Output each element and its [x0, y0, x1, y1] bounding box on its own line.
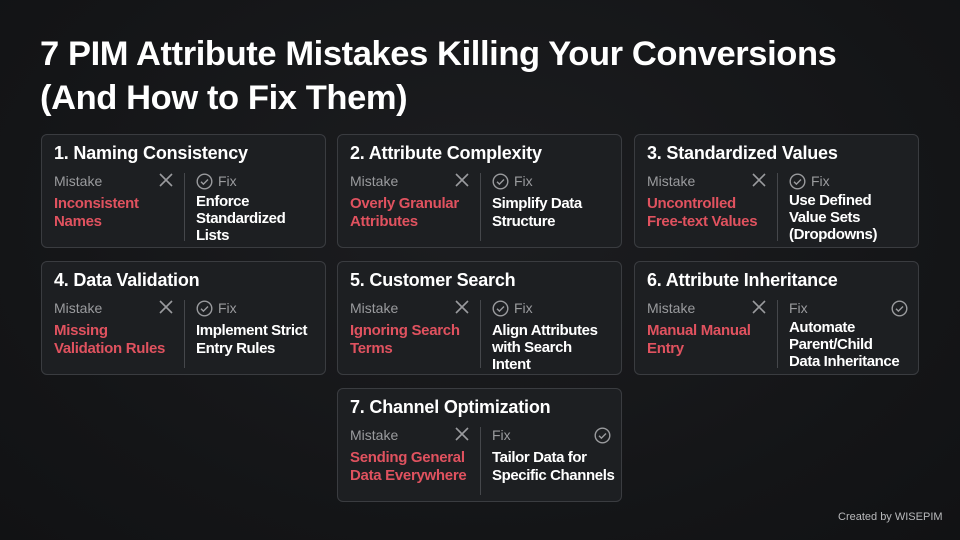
card 7: Data Everywhere [350, 467, 466, 484]
title [40, 35, 836, 117]
card 6: 6. Attribute Inheritance [647, 270, 838, 290]
card 7: Fix [492, 427, 511, 443]
card 6: Parent/Child [789, 336, 873, 353]
card 2: Mistake [350, 173, 398, 189]
card 6: Entry [647, 340, 684, 357]
card 1: 1. Naming Consistency [54, 143, 248, 163]
card 4: Validation Rules [54, 340, 165, 357]
card 2 [337, 134, 622, 248]
card 7: 7. Channel Optimization [350, 397, 550, 417]
card 3 [634, 134, 919, 248]
card 6: Manual Manual [647, 322, 751, 339]
card 4: Entry Rules [196, 340, 275, 357]
card 1: Names [54, 213, 102, 230]
card 1: Enforce [196, 193, 249, 210]
card 6: Fix [789, 300, 808, 316]
card 7: Specific Channels [492, 467, 614, 484]
card 5: Ignoring Search [350, 322, 460, 339]
card 2: Fix [514, 173, 533, 189]
card 3: Use Defined [789, 192, 871, 209]
card 1: Lists [196, 227, 229, 244]
card 6 [634, 261, 919, 375]
card 4: 4. Data Validation [54, 270, 199, 290]
card 5: with Search [492, 339, 572, 356]
credit: Created by WISEPIM [838, 511, 943, 523]
card 5: 5. Customer Search [350, 270, 515, 290]
card 5: Intent [492, 356, 530, 373]
card 3: Uncontrolled [647, 195, 736, 212]
card 2: Structure [492, 213, 555, 230]
card 7: Tailor Data for [492, 449, 587, 466]
title: 7 PIM Attribute Mistakes Killing Your Conversions [40, 35, 836, 73]
card 3: Free-text Values [647, 213, 757, 230]
card 4: Missing [54, 322, 108, 339]
card 1: Fix [218, 173, 237, 189]
card 4: Fix [218, 300, 237, 316]
card 4: Implement Strict [196, 322, 307, 339]
card 6: Automate [789, 319, 855, 336]
card 3: Value Sets [789, 209, 860, 226]
card 7 [337, 388, 622, 502]
card 3: Mistake [647, 173, 695, 189]
card 3: Fix [811, 173, 830, 189]
card 2: Attributes [350, 213, 418, 230]
card 1: Inconsistent [54, 195, 139, 212]
card 4 [41, 261, 326, 375]
card 1: Standardized [196, 210, 285, 227]
card 5: Align Attributes [492, 322, 598, 339]
card 1 [41, 134, 326, 248]
card 1: Mistake [54, 173, 102, 189]
card 6: Data Inheritance [789, 353, 899, 370]
card 4: Mistake [54, 300, 102, 316]
title: (And How to Fix Them) [40, 79, 407, 117]
card 5: Fix [514, 300, 533, 316]
card 3: 3. Standardized Values [647, 143, 838, 163]
card 5 [337, 261, 622, 375]
card 7: Mistake [350, 427, 398, 443]
card 6: Mistake [647, 300, 695, 316]
card 2: Simplify Data [492, 195, 582, 212]
card 2: Overly Granular [350, 195, 459, 212]
card 2: 2. Attribute Complexity [350, 143, 542, 163]
card 5: Terms [350, 340, 392, 357]
card 7: Sending General [350, 449, 465, 466]
card 3: (Dropdowns) [789, 226, 877, 243]
card 5: Mistake [350, 300, 398, 316]
